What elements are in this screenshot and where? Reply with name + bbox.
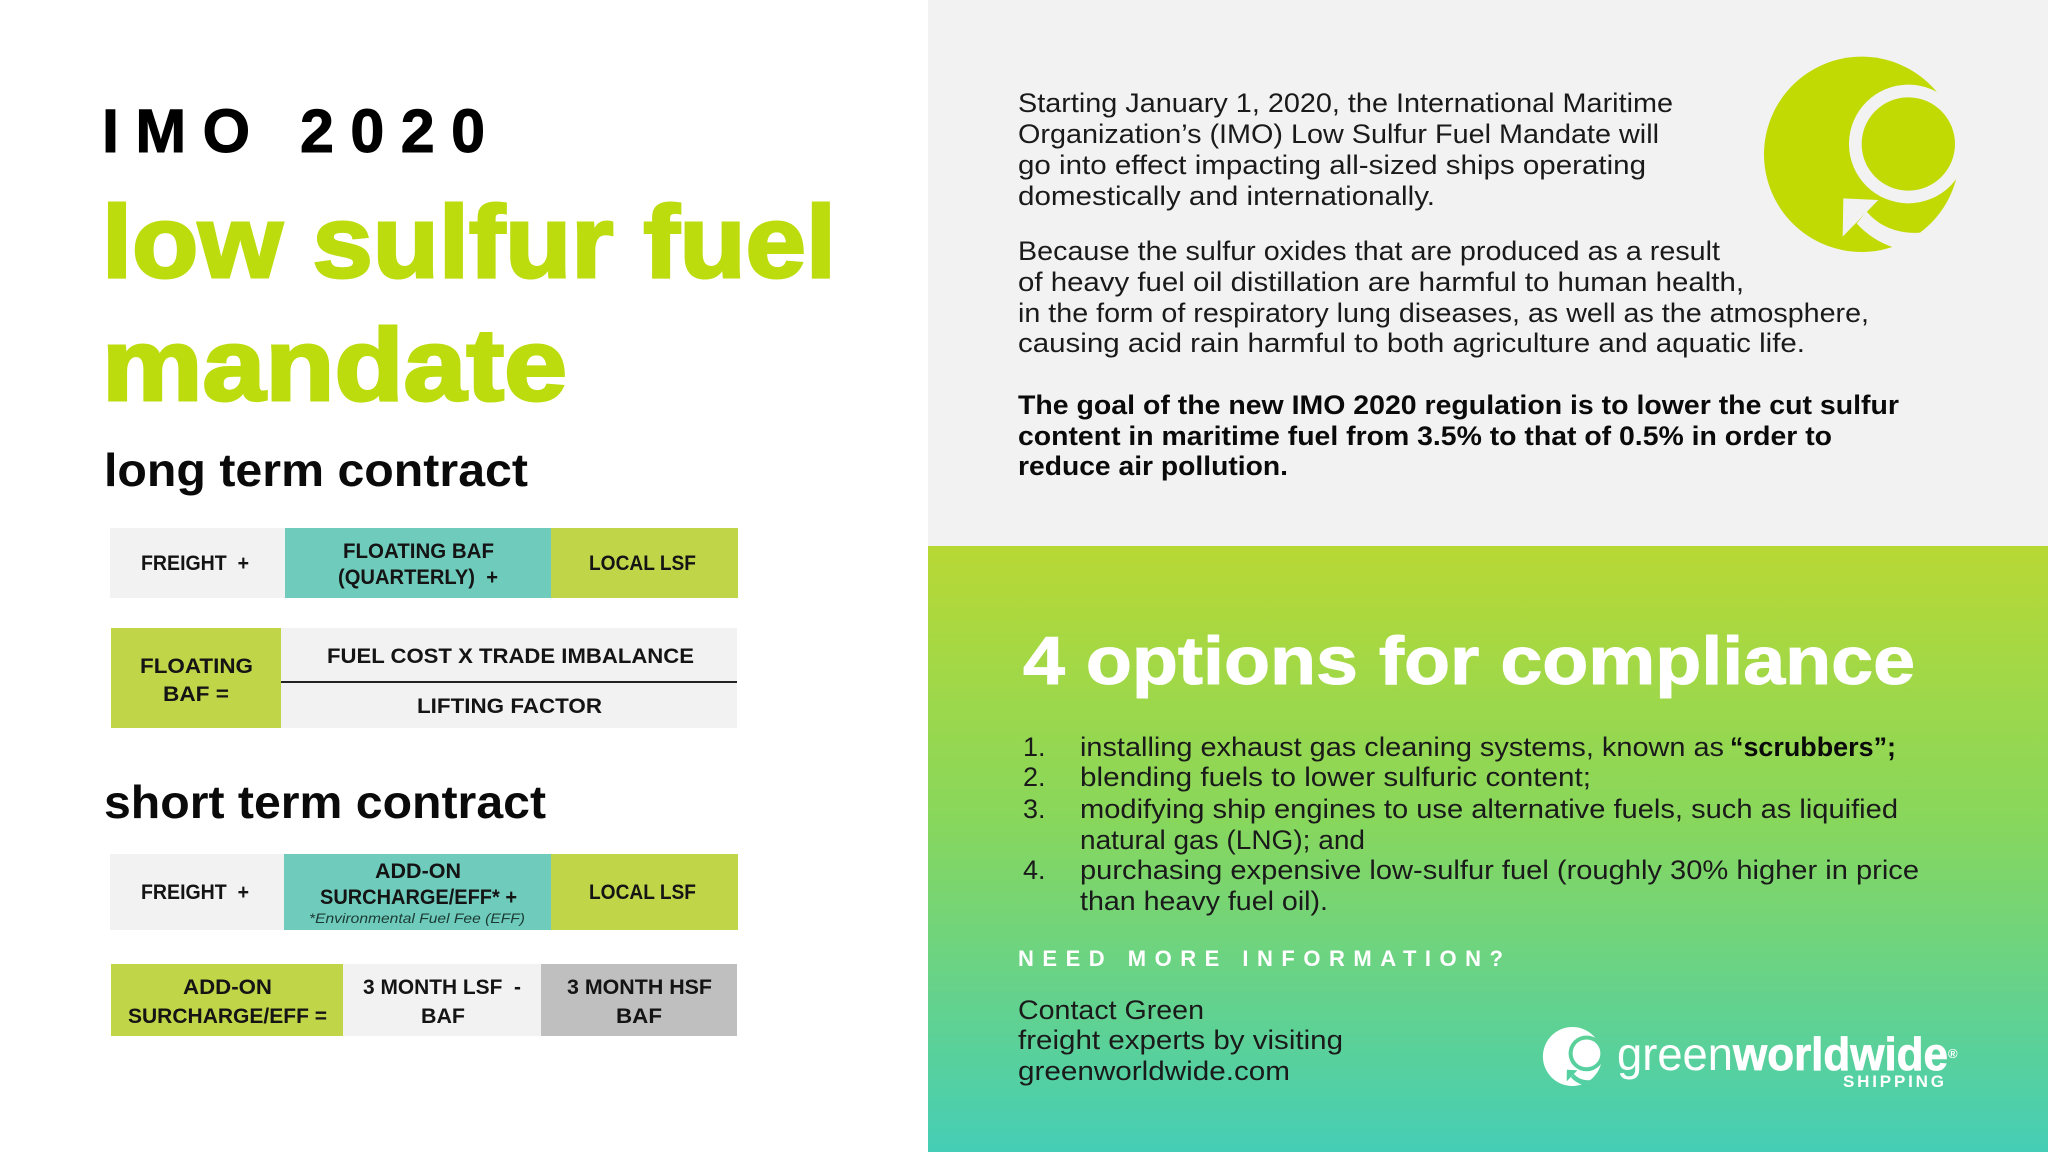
cell: 3 month HSF BAF: 3 MONTH HSF [567,976,712,999]
icon: green globe with arrow [1764,57,1968,253]
cell: add-on surcharge: ADD-ON [375,860,461,883]
goal statement: reduce air pollution. [1018,451,1288,481]
option 2: 2. [1023,762,1046,792]
intro paragraph 2: causing acid rain harmful to both agriculture and aquatic life. [1018,328,1805,358]
intro paragraph 1: Organization’s (IMO) Low Sulfur Fuel Mandate will [1018,119,1659,149]
numbered list of options [1023,732,1919,916]
floating BAF equation [111,628,737,728]
cell: 3 month LSF BAF: BAF [421,1005,465,1028]
option 4: 4. [1023,855,1046,885]
option 2: blending fuels to lower sulfuric content; [1080,762,1591,792]
logo icon [1542,1027,1601,1086]
intro paragraph 2: Because the sulfur oxides that are produced as a result [1018,236,1721,266]
cell: freight [110,528,285,598]
fraction: fuel cost x trade imbalance over lifting factor: LIFTING FACTOR [417,695,602,718]
cell: 3 month HSF BAF: BAF [616,1005,662,1028]
title: IMO 2020: IMO 2020 [102,97,485,165]
cell: local LSF: LOCAL LSF [589,552,696,575]
option 1 [1023,732,1896,762]
goal statement: content in maritime fuel from 3.5% to that of 0.5% in order to [1018,421,1832,451]
option 1: installing exhaust gas cleaning systems, known as [1080,732,1724,762]
long term price formula row [110,528,738,598]
cell: add-on surcharge equals: SURCHARGE/EFF = [128,1005,327,1028]
logo: green worldwide shipping: ® [1948,1046,1958,1061]
logo wordmark: green [1617,1028,1733,1080]
main heading: low sulfur fuel mandate: mandate [102,308,567,422]
cell: add-on surcharge equals: ADD-ON [183,976,272,999]
cell: local LSF [551,528,738,598]
cell: 3 month LSF BAF [343,964,541,1036]
heading: 4 options for compliance: 4 options for compliance [1023,623,1915,699]
cell: add-on surcharge: SURCHARGE/EFF* + [320,886,517,909]
intro paragraph 1: go into effect impacting all-sized ships operating [1018,150,1646,180]
panel: introduction [928,0,2048,546]
cell: add-on surcharge: *Environmental Fuel Fee (EFF) [309,910,525,926]
cell: floating BAF quarterly: FLOATING BAF [343,540,494,563]
contact text [1018,995,1343,1086]
main heading: low sulfur fuel mandate: low sulfur fuel [102,185,836,299]
cell: add-on surcharge [284,854,551,930]
cell: local LSF: LOCAL LSF [589,881,696,904]
option 3: modifying ship engines to use alternative fuels, such as liquified [1080,794,1898,824]
cell: freight: FREIGHT + [141,552,249,575]
intro paragraph 1: domestically and internationally. [1018,181,1435,211]
cell: 3 month HSF BAF [541,964,737,1036]
option 3: 3. [1023,794,1046,824]
logo: green worldwide shipping: SHIPPING [1843,1072,1944,1091]
cell: local LSF [551,854,738,930]
option 4 [1023,855,1919,916]
fraction: fuel cost x trade imbalance over lifting factor: FUEL COST X TRADE IMBALANCE [327,645,694,668]
fraction: fuel cost x trade imbalance over lifting factor [281,628,737,728]
option 1: “scrubbers”; [1730,732,1896,762]
contact text: greenworldwide.com [1018,1056,1290,1086]
heading: long term contract: long term contract [104,444,528,496]
cell: floating BAF equals: BAF = [163,683,229,706]
intro paragraph 1: Starting January 1, 2020, the International Maritime [1018,88,1673,118]
cell: freight: FREIGHT + [141,881,249,904]
contact text: Contact Green [1018,995,1204,1025]
intro paragraph 2 [1018,236,1869,358]
main heading: low sulfur fuel mandate [102,185,836,422]
contact text: freight experts by visiting [1018,1025,1343,1055]
heading: need more information: NEED MORE INFORMATION? [1018,946,1503,971]
cell: floating BAF equals: FLOATING [140,655,253,678]
goal statement: The goal of the new IMO 2020 regulation is to lower the cut sulfur [1018,390,1900,420]
left panel background [0,0,929,1152]
cell: floating BAF quarterly [285,528,551,598]
add-on surcharge equation [111,964,737,1036]
intro paragraph 1 [1018,88,1673,211]
logo: green worldwide shipping: worldwide [1732,1028,1948,1080]
cell: add-on surcharge equals [111,964,343,1036]
option 4: than heavy fuel oil). [1080,886,1328,916]
option 3: natural gas (LNG); and [1080,825,1365,855]
intro paragraph 2: of heavy fuel oil distillation are harmful to human health, [1018,267,1744,297]
cell: freight [110,854,284,930]
option 3 [1023,794,1898,855]
cell: floating BAF quarterly: (QUARTERLY) + [338,566,498,589]
cell: 3 month LSF BAF: 3 MONTH LSF - [363,976,521,999]
intro paragraph 2: in the form of respiratory lung diseases, as well as the atmosphere, [1018,298,1869,328]
logo: green worldwide shipping [1542,1027,1958,1087]
goal statement [1018,390,1900,481]
short term price formula row [110,854,738,930]
panel: 4 options for compliance [928,546,2048,1152]
cell: floating BAF equals [111,628,281,728]
heading: short term contract: short term contract [104,776,546,828]
option 1: 1. [1023,732,1046,762]
option 4: purchasing expensive low-sulfur fuel (roughly 30% higher in price [1080,855,1919,885]
